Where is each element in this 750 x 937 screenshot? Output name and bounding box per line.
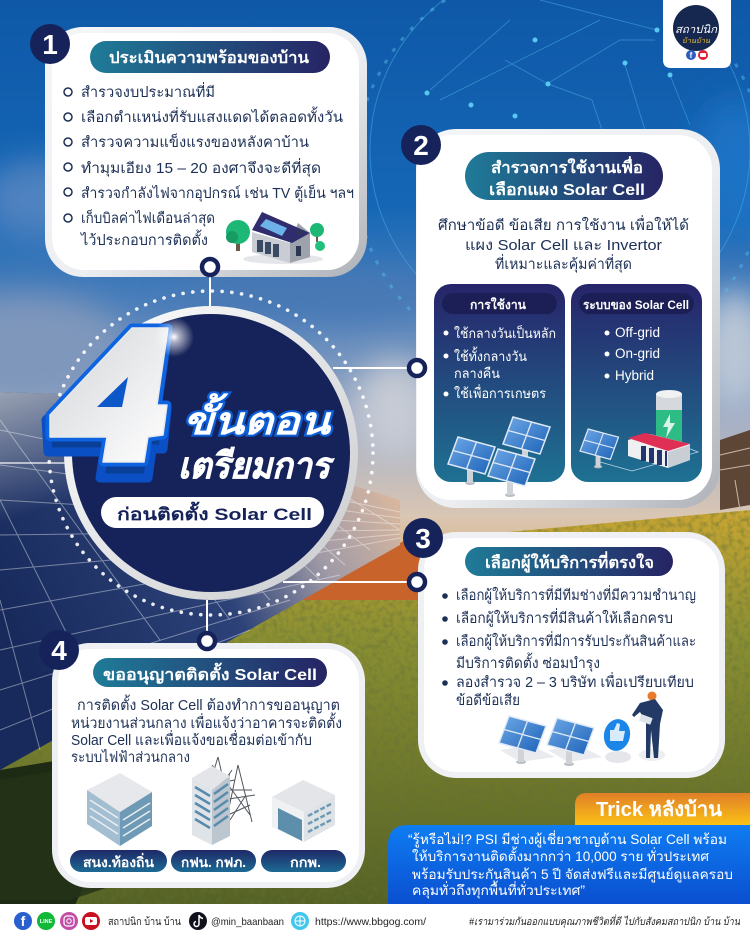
big numeral 4 (46, 317, 194, 478)
checklist: สำรวจกำลังไฟจากอุปกรณ์ เช่น TV ตู้เย็น ฯลฯ (81, 183, 354, 202)
icon: panels, thumbs up and technician (499, 692, 665, 766)
intro text (438, 215, 689, 273)
icon: youtube (82, 912, 100, 930)
number badge 2 (401, 125, 441, 165)
checklist: เลือกผู้ให้บริการที่มีสินค้าให้เลือกครบ (456, 608, 673, 627)
footer bar (0, 904, 750, 937)
icon: facebook: f (21, 913, 26, 929)
intro text: ที่เหมาะและคุ้มค่าที่สุด (495, 254, 632, 273)
label pills: กกพ. (290, 855, 321, 870)
sub-panel: usage: กลางคืน (454, 366, 500, 381)
icon: tall building and pylon (192, 757, 255, 845)
checklist: เลือกผู้ให้บริการที่มีทีมช่างที่มีความชำนาญ (456, 585, 696, 604)
sub-panel: usage: ใช้กลางวันเป็นหลัก (454, 324, 556, 341)
body text: Solar Cell และเพื่อแจ้งขอเชื่อมต่อเข้ากับ (71, 730, 312, 749)
label pills: กฟน. กฟภ. (181, 855, 246, 870)
sub-panel: usage: ใช้ทั้งกลางวัน (454, 346, 527, 364)
heading: ประเมินความพร้อมของบ้าน (109, 49, 309, 67)
number badge 2: 2 (413, 130, 429, 161)
checklist: ทำมุมเอียง 15 – 20 องศาจึงจะดีที่สุด (81, 158, 321, 177)
website url: https://www.bbgog.com/ (315, 916, 426, 928)
icon: tiktok (189, 912, 207, 930)
sub-panel: solar cell systems (571, 284, 702, 482)
panel: step 1 readiness (45, 27, 367, 277)
number badge 3: 3 (415, 523, 431, 554)
connector nodes (199, 259, 425, 649)
intro text: ศึกษาข้อดี ข้อเสีย การใช้งาน เพื่อให้ได้ (438, 215, 689, 234)
heading: เลือกผู้ให้บริการที่ตรงใจ (485, 551, 654, 574)
label pills (70, 850, 346, 872)
icon: house with solar roof and trees (226, 212, 325, 264)
heading (90, 41, 330, 73)
heading (465, 152, 663, 200)
icon: battery, panel and inverter (580, 390, 698, 471)
checklist (442, 585, 696, 709)
title text: ขั้นตอน (183, 393, 332, 443)
sub-panel: usage (434, 284, 565, 497)
icon: instagram (60, 912, 78, 930)
number badge 1 (30, 24, 70, 64)
body text: ระบบไฟฟ้าส่วนกลาง (71, 748, 190, 766)
heading: สำรวจการใช้งานเพื่อ (491, 156, 643, 177)
sub-panel: solar cell systems: ระบบของ Solar Cell (583, 298, 689, 312)
checklist: เลือกตำแหน่งที่รับแสงแดดได้ตลอดทั้งวัน (81, 106, 343, 126)
heading: ขออนุญาตติดตั้ง Solar Cell (103, 662, 317, 685)
body text (71, 694, 342, 766)
central badge (46, 306, 358, 600)
body text: หน่วยงานส่วนกลาง เพื่อแจ้งว่าอาคารจะติดตั้ง (71, 712, 342, 732)
tiktok handle: @min_baanbaan (211, 916, 284, 928)
subtitle pill: ก่อนติดตั้ง Solar Cell (117, 501, 312, 524)
sub-panel: usage: ใช้เพื่อการเกษตร (454, 384, 546, 401)
title text (178, 393, 335, 486)
logo card: สถาปนิก (675, 24, 718, 36)
sub-panel: usage: การใช้งาน (470, 297, 526, 312)
heading (93, 658, 327, 687)
checklist: มีบริการติดตั้ง ซ่อมบำรุง (456, 652, 600, 672)
logo card: f (690, 51, 693, 60)
callout: Trick: Trick หลังบ้าน (596, 798, 722, 821)
body text: การติดตั้ง Solar Cell ต้องทำการขออนุญาต (77, 694, 340, 714)
icon: office building (87, 773, 152, 846)
checklist: สำรวจความแข็งแรงของหลังคาบ้าน (81, 132, 309, 151)
panel: step 2 usage survey (416, 129, 720, 508)
dotted ring around the central badge (49, 291, 373, 615)
checklist: สำรวจงบประมาณที่มี (81, 82, 215, 101)
number badge 4: 4 (51, 635, 67, 666)
icon: three solar panels (448, 417, 550, 497)
number badge 3 (403, 518, 443, 558)
icon: line: LINE (40, 919, 53, 925)
callout: Trick: พร้อมรับประกันสินค้า 5 ปี จัดส่งฟรีและมีศูนย์ดูแลครอบ (412, 866, 733, 883)
callout: Trick: ให้บริการงานติดตั้งมากกว่า 10,000 ราย ทั่วประเทศ (412, 846, 709, 864)
checklist: ข้อดีข้อเสีย (456, 692, 520, 709)
logo card: บ้านบ้าน (682, 37, 710, 45)
panel: step 4 get a permit (52, 643, 365, 888)
callout: Trick: “รู้หรือไม่!? PSI มีช่างผู้เชี่ยวชาญด้าน Solar Cell พร้อม (408, 830, 727, 848)
icon: low building (272, 780, 335, 842)
sub-panel: solar cell systems: On-grid (615, 346, 660, 361)
icon: website (291, 912, 309, 930)
title text: เตรียมการ (178, 445, 335, 486)
panel: step 3 choose a provider (418, 532, 725, 778)
label pills: สนง.ท้องถิ่น (83, 852, 155, 870)
number badge 1: 1 (42, 29, 58, 60)
checklist: เก็บบิลค่าไฟเดือนล่าสุด (81, 208, 215, 227)
checklist: ไว้ประกอบการติดตั้ง (80, 229, 208, 249)
icon: line (37, 912, 55, 930)
subtitle pill (101, 497, 324, 528)
connector lines (0, 277, 408, 632)
callout: Trick (388, 793, 750, 904)
heading (465, 547, 673, 576)
intro text: แผง Solar Cell และ Invertor (465, 238, 662, 254)
sub-panel: solar cell systems: Off-grid (615, 325, 660, 340)
social name: สถาปนิก บ้าน บ้าน (108, 916, 181, 928)
checklist: ลองสำรวจ 2 – 3 บริษัท เพื่อเปรียบเทียบ (456, 672, 694, 691)
icon: facebook (14, 912, 32, 930)
number badge 4 (39, 630, 79, 670)
callout: Trick: คลุมทั่วถึงทุกพื้นที่ทั่วประเทศ” (412, 880, 585, 899)
checklist: เลือกผู้ให้บริการที่มีการรับประกันสินค้าและ (456, 631, 696, 650)
logo card (663, 0, 731, 68)
checklist (64, 82, 354, 249)
heading: เลือกแผง Solar Cell (489, 181, 645, 199)
sub-panel: solar cell systems: Hybrid (615, 368, 654, 383)
